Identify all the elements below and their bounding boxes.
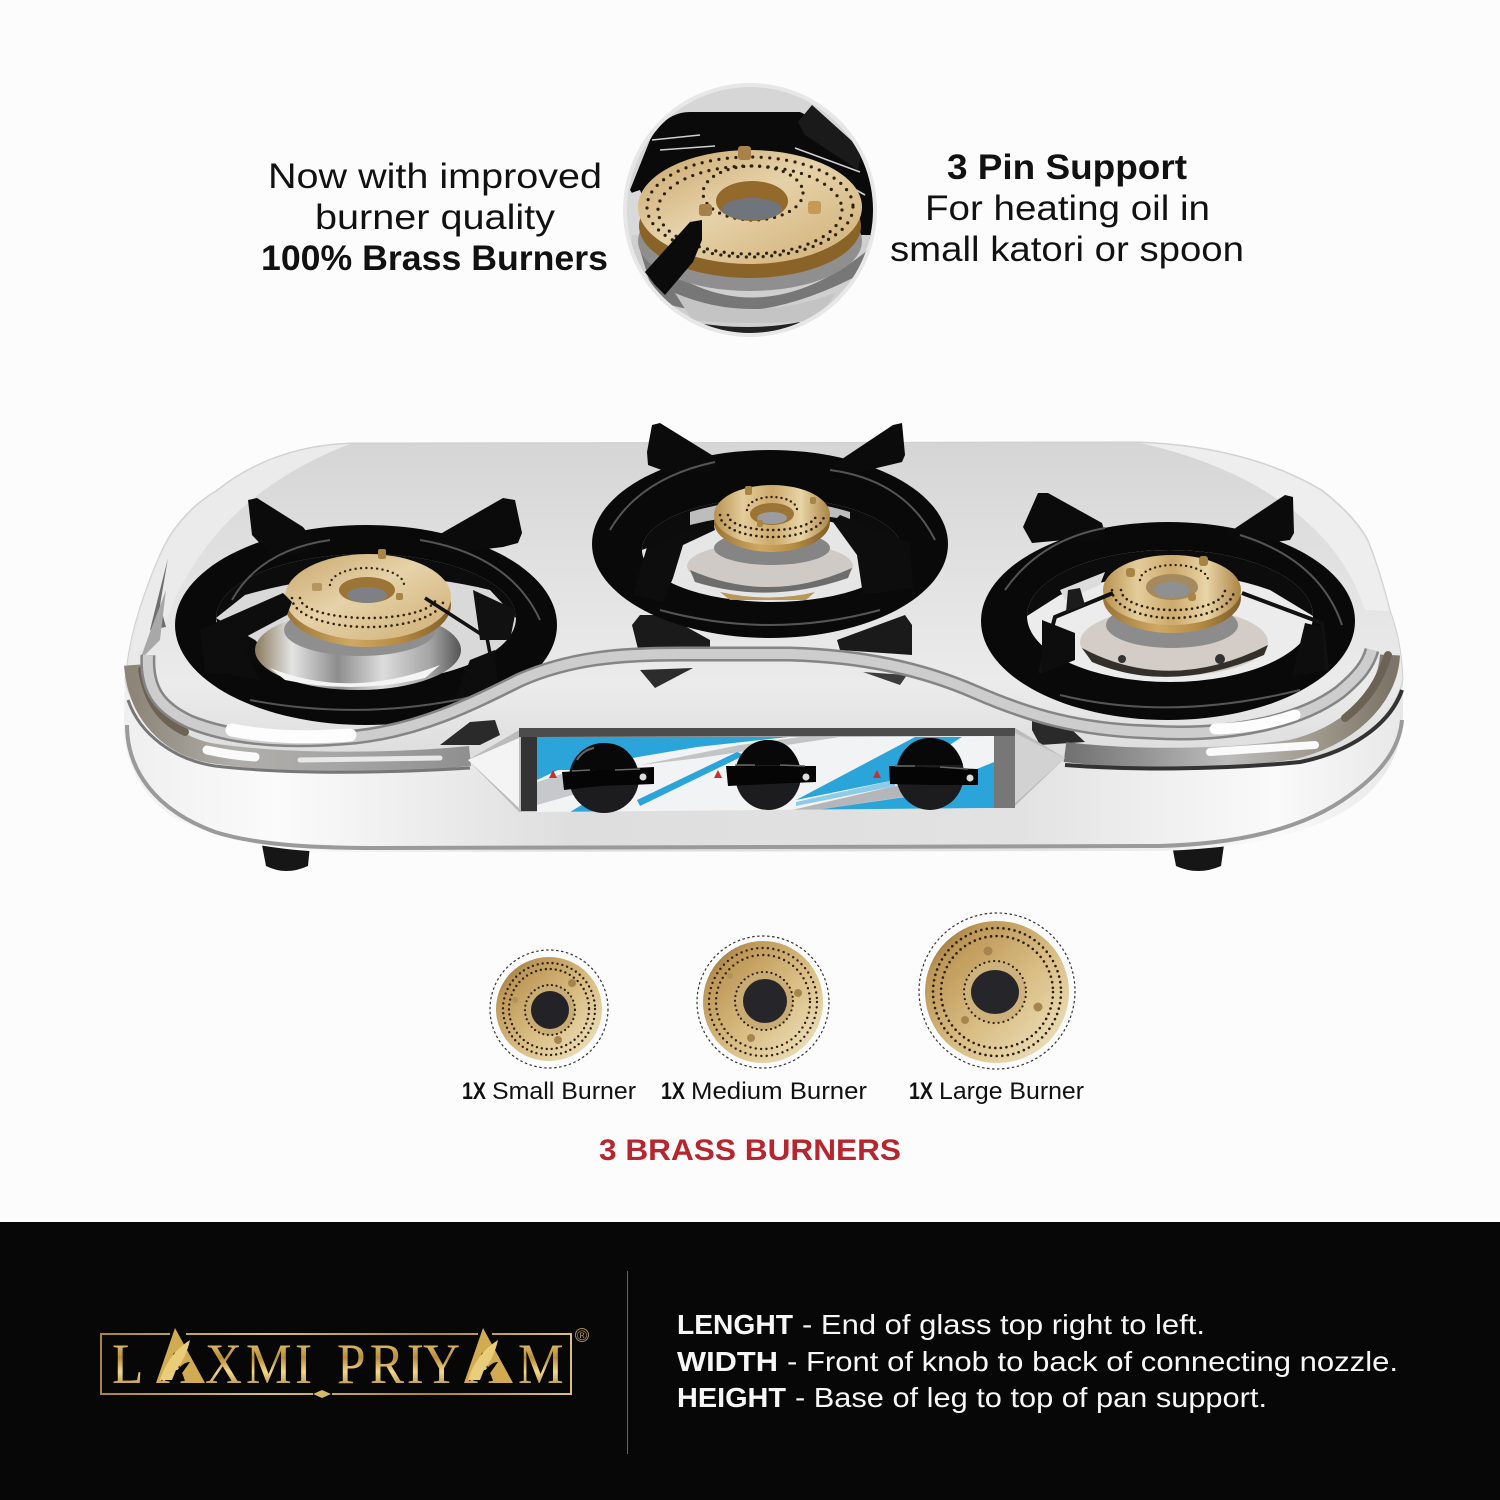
heading: 3 brass burners: 3 BRASS BURNERS [599,1134,901,1167]
burner labels [462,1078,1084,1105]
text: 3 pin support: 3 Pin Support [947,148,1187,187]
burner labels: Large Burner [939,1078,1084,1105]
reflection: pan support shadows [440,615,1085,745]
dimension notes: - Base of leg to top of pan support. [795,1382,1267,1413]
chrome end cap: right [1015,733,1065,803]
burner: right [981,493,1355,720]
chrome rim: S-curve trim [148,650,1372,740]
dimension notes: - End of glass top right to left. [802,1309,1205,1340]
burner photo: small [490,950,608,1068]
foot: left [262,845,310,871]
dimension notes [677,1309,1398,1413]
logo: Laxmi Priyam: ® [577,1327,588,1343]
chrome end cap: left [468,738,519,808]
product photo: three burner stainless steel gas stove [124,423,1403,871]
burner labels: 1X [909,1078,933,1105]
text: 3 pin support [890,148,1244,269]
burner: middle [592,423,948,638]
pan support fingers: middle burner [647,423,718,472]
text: improved burner quality [261,157,608,278]
burner labels: Small Burner [492,1078,636,1105]
burner photo: large [919,913,1075,1069]
dimension notes: HEIGHT [677,1382,786,1413]
burner labels: Medium Burner [691,1078,867,1105]
pan support fingers: left burner [248,498,313,557]
stove top plate [125,442,1403,766]
chrome rim: outer band [128,655,1402,772]
foot: right [1172,845,1224,871]
burner: left [175,498,557,725]
knob: middle [726,740,816,810]
plate edge reflections [130,444,350,655]
stove body skirt [124,442,1403,852]
text: 3 pin support: small katori or spoon [890,230,1244,269]
text: 3 pin support: For heating oil in [925,189,1210,228]
knob: right [889,738,978,810]
dimension notes: WIDTH [677,1346,778,1377]
inset: burner close-up photo [620,80,880,340]
footer band [0,1222,1500,1500]
knob: left [562,743,654,813]
dimension notes: - Front of knob to back of connecting nozzle. [787,1346,1398,1377]
control panel: blue swoosh graphic [537,733,997,815]
burner labels: 1X [661,1078,685,1105]
text: improved burner quality: 100% Brass Burners [261,239,608,278]
text: improved burner quality: Now with improved [268,157,602,196]
pan support fingers: right burner [1023,493,1105,543]
control panel bezel [468,728,1065,812]
dimension notes: LENGHT [677,1309,793,1340]
burner labels: 1X [462,1078,486,1105]
burner photo: medium [697,936,829,1068]
text: improved burner quality: burner quality [315,198,556,237]
logo: Laxmi Priyam: LAXMI PRIYAM [112,1333,564,1396]
